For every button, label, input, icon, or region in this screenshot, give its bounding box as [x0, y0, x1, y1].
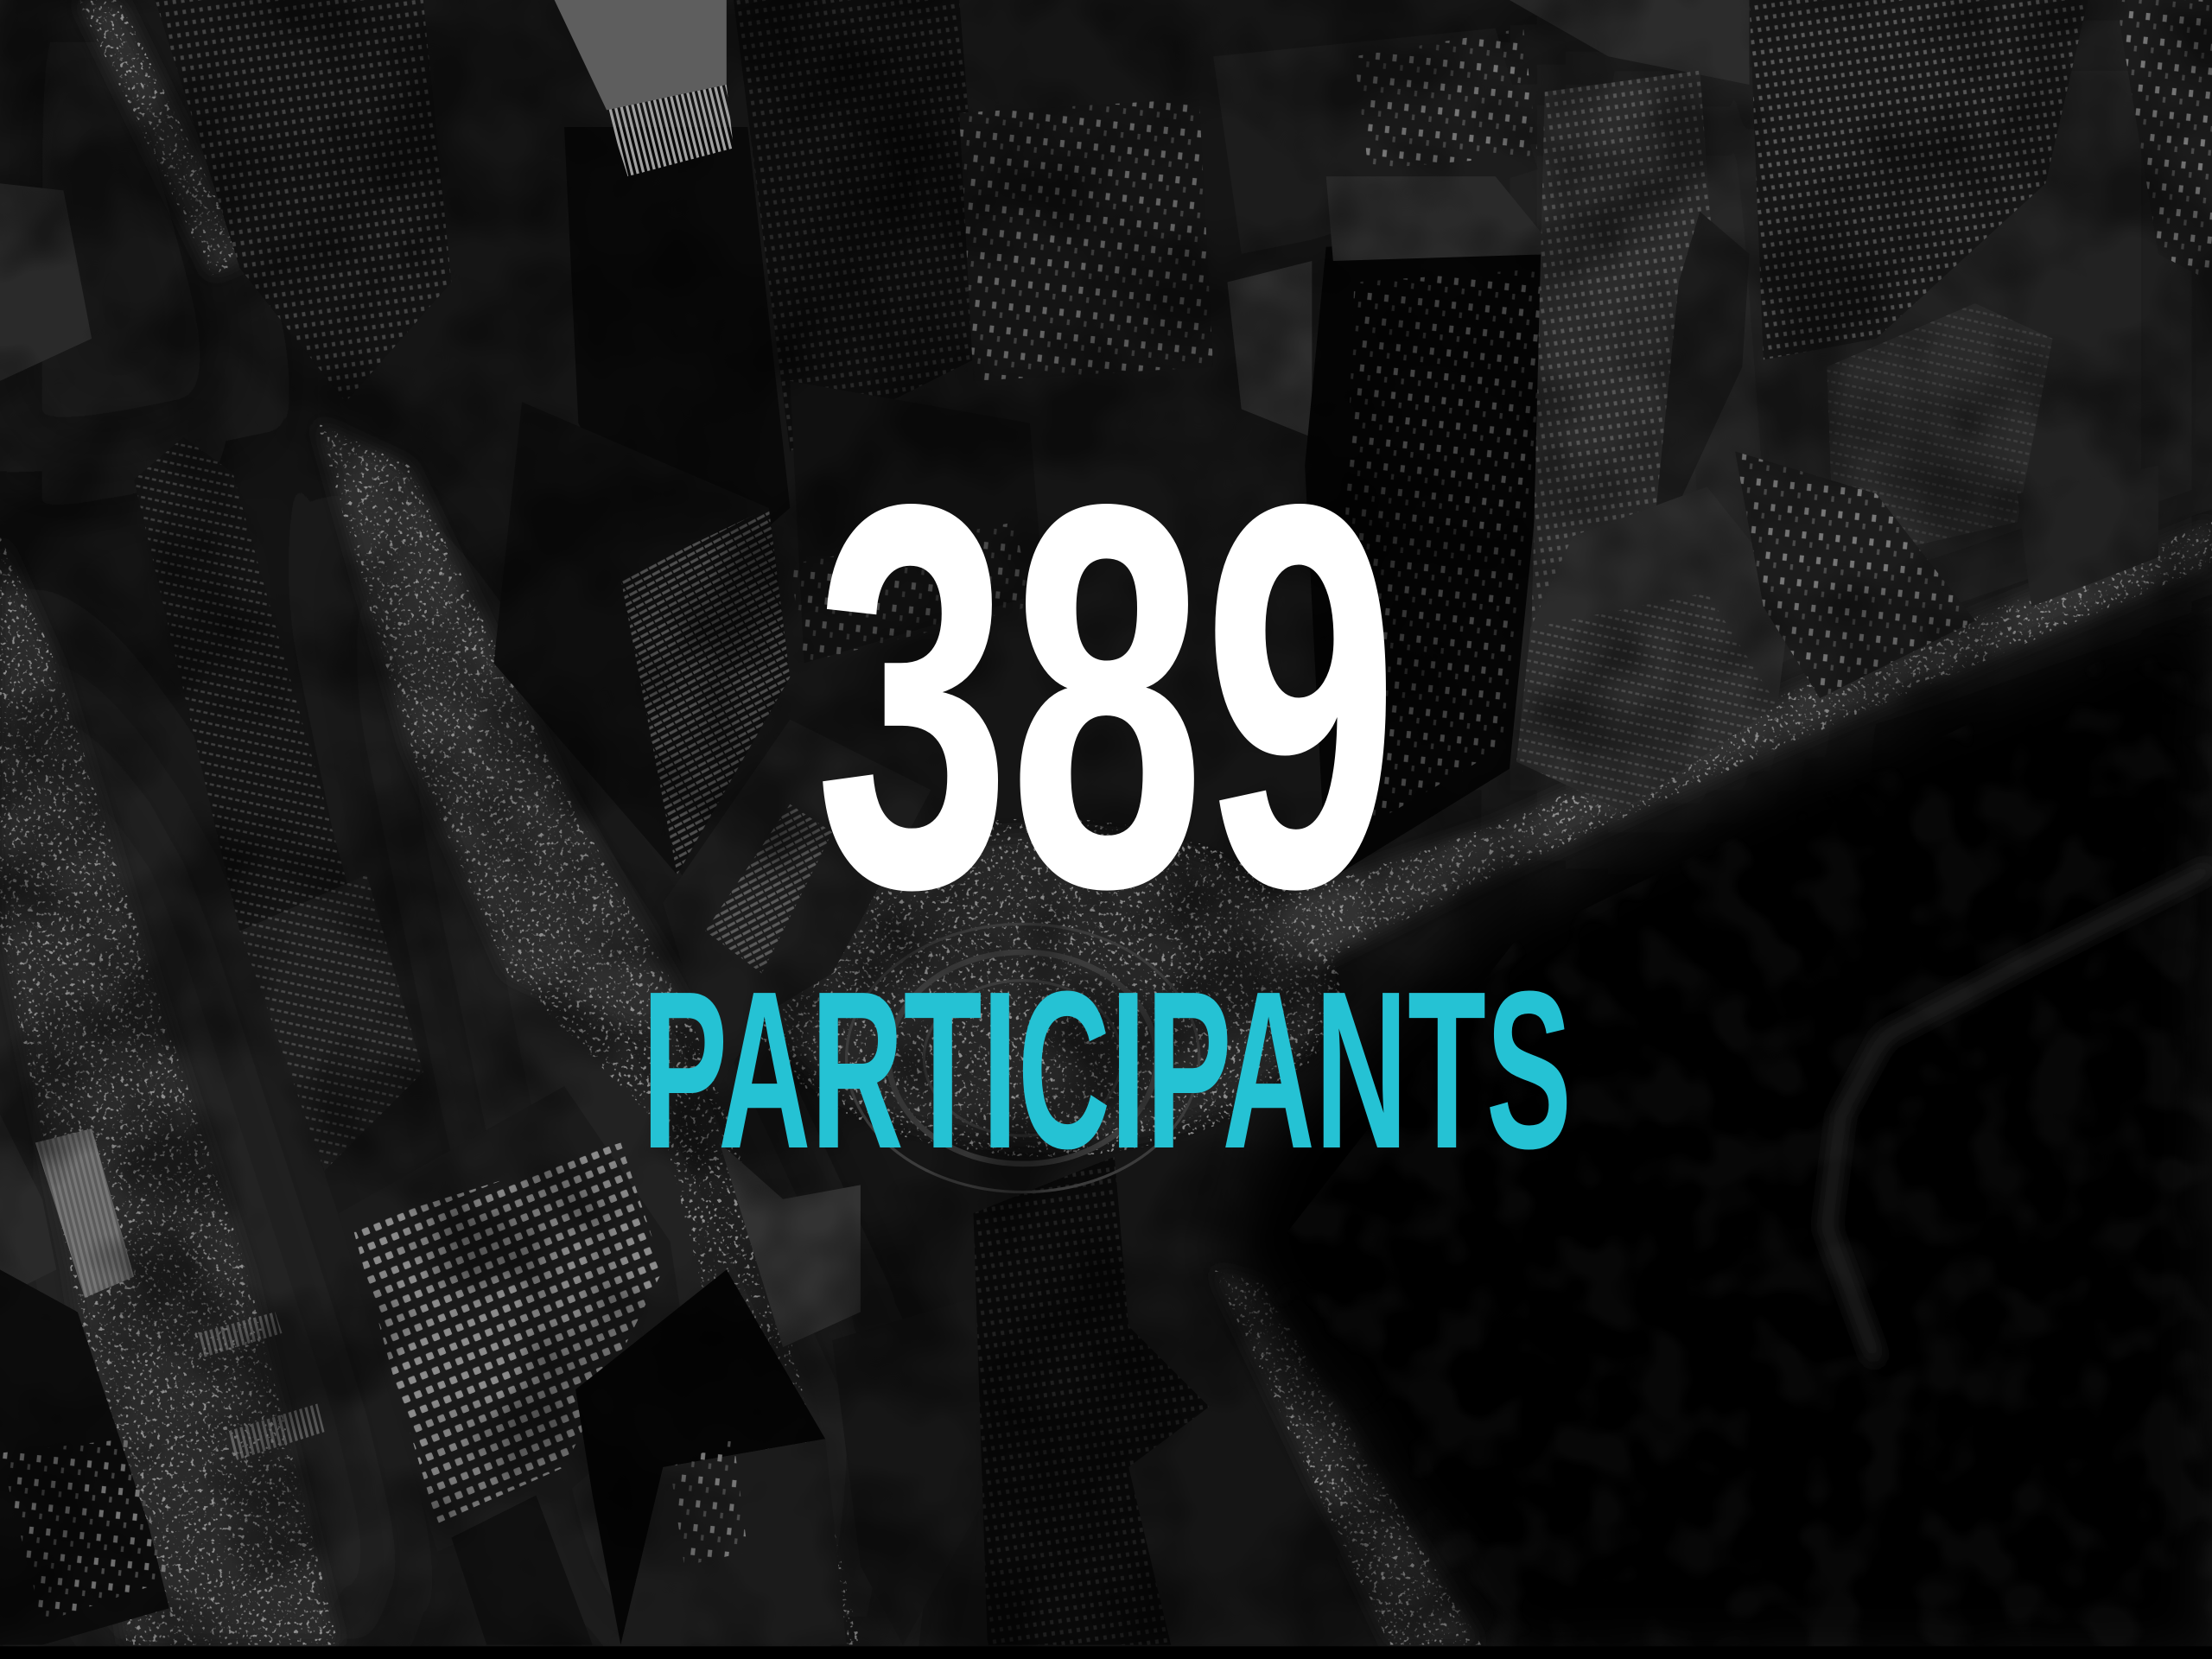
building blocks top left [156, 0, 451, 402]
big number 389: 389 [816, 393, 1398, 1000]
park paths [1827, 868, 2212, 1362]
bright roof top center [555, 0, 734, 176]
tall slab and dark building bottom center [575, 1269, 825, 1645]
curved plaza building [663, 720, 931, 1086]
diagonal slab center [493, 402, 790, 874]
black tower [1305, 232, 1563, 881]
central park dark area [1227, 600, 2212, 1659]
lower left roofs [35, 1128, 134, 1298]
stepped tower lower [1516, 486, 1791, 811]
towers far right [1749, 0, 2088, 359]
central dark tower column [564, 127, 790, 607]
crosswalks [198, 1312, 325, 1460]
window grid block [339, 1086, 691, 1552]
pale tower [1530, 71, 1714, 663]
cylindrical tower left [134, 437, 353, 931]
circle monument rings [847, 924, 1199, 1192]
building group top right [1213, 29, 1538, 254]
bottom black strip [0, 1646, 2212, 1659]
dark buildings lower center [832, 1298, 988, 1645]
